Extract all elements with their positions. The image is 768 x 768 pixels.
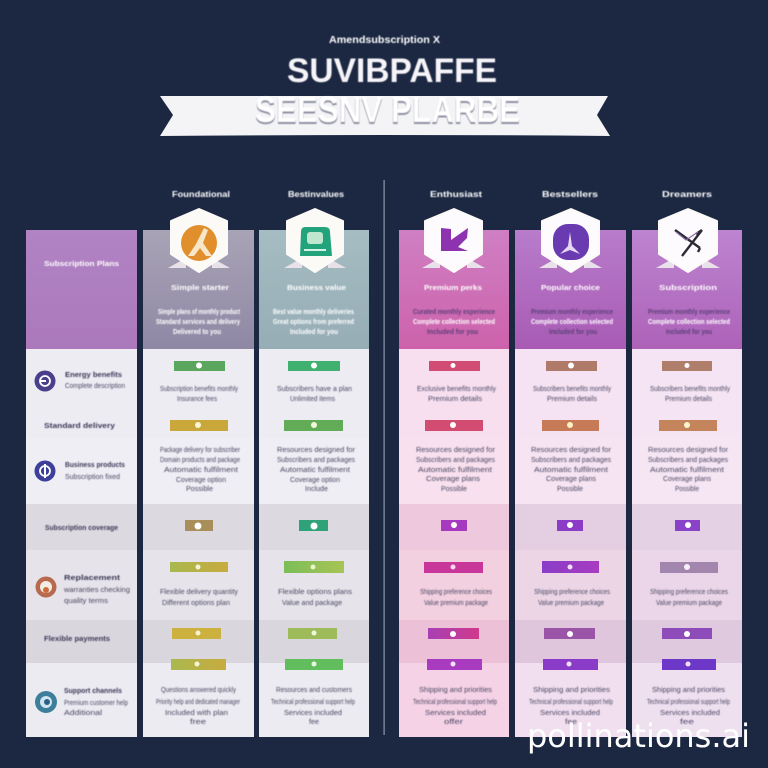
- rating bar: [660, 562, 718, 573]
- plan description: [413, 309, 495, 336]
- plan description: Included for you: [427, 329, 478, 336]
- feature text: Package delivery for subscriber: [160, 447, 241, 454]
- plan description: Great options from preferred: [273, 319, 354, 326]
- plan description: Simple plans of monthly product: [158, 309, 240, 316]
- feature text: [156, 687, 240, 726]
- row label: two: Standard delivery: [44, 423, 115, 430]
- icon: row one: [34, 370, 56, 392]
- plan subtitle: Premium perks: [424, 285, 482, 292]
- row label: four: Subscription coverage: [45, 525, 118, 532]
- feature text: Coverage plans: [546, 476, 597, 483]
- rating bar: [299, 520, 328, 531]
- panel: plan four: [515, 190, 626, 737]
- plan description: Delivered to you: [173, 329, 221, 336]
- feature text: Subscribers benefits monthly: [650, 386, 730, 393]
- feature text: offer: [444, 719, 464, 726]
- feature text: Shipping preference choices: [534, 589, 610, 596]
- feature text: Questions answered quickly: [161, 687, 236, 694]
- ribbon banner with subtitle: [160, 89, 610, 136]
- feature text: Premium details: [547, 396, 597, 403]
- plan description: Best value monthly deliveries: [273, 309, 354, 316]
- row label: one: Complete description: [65, 383, 125, 390]
- rating bar: [285, 659, 343, 670]
- feature text: Resources designed for: [531, 447, 612, 454]
- feature text: Coverage plans: [663, 476, 711, 483]
- rating bar: [662, 628, 712, 639]
- feature text: [650, 386, 730, 403]
- feature text: [277, 447, 356, 493]
- rating bar: [171, 659, 226, 670]
- plan description: Included for you: [666, 329, 712, 336]
- plan description: [648, 309, 730, 336]
- feature text: Shipping preference choices: [650, 589, 728, 596]
- rating bar: [170, 562, 228, 572]
- plan description: [531, 309, 613, 336]
- plan description: Standard services and delivery: [156, 319, 240, 326]
- feature text: Coverage option: [176, 477, 226, 484]
- plan name: Enthusiast: [430, 190, 482, 199]
- feature text: Flexible delivery quantity: [160, 589, 239, 596]
- feature text: Shipping and priorities: [652, 687, 726, 694]
- panel: row labels column: [26, 230, 137, 737]
- row label: seven: Premium customer help: [64, 700, 128, 707]
- plan description: Premium monthly experience: [531, 309, 613, 316]
- rating bar: [288, 361, 340, 371]
- plan name: Bestinvalues: [288, 190, 345, 199]
- feature text: Technical professional support help: [271, 699, 355, 706]
- feature text: Possible: [557, 486, 583, 493]
- row label: one: [65, 372, 125, 390]
- feature text: Included with plan: [165, 710, 228, 717]
- plan name: Dreamers: [662, 190, 713, 199]
- feature text: [278, 589, 353, 607]
- row label: five: warranties checking: [63, 587, 130, 594]
- rating bar: [174, 361, 225, 371]
- plan description: Complete collection selected: [648, 319, 730, 326]
- feature text: Premium details: [665, 396, 712, 403]
- feature text: Technical professional support help: [529, 699, 613, 706]
- feature text: Unlimited items: [290, 396, 335, 403]
- plan description: [156, 309, 240, 336]
- feature text: Services included: [540, 710, 600, 717]
- feature text: Value and package: [282, 600, 342, 607]
- feature text: Domain products and package: [160, 457, 240, 464]
- rating bar: [284, 561, 344, 573]
- eyebrow text: Amendsubscription X: [329, 35, 440, 46]
- rating bar: [542, 420, 599, 431]
- central divider: [384, 180, 385, 735]
- rating bar: [544, 628, 595, 639]
- plan description: Included for you: [549, 329, 597, 336]
- row label: seven: Additional: [64, 710, 103, 717]
- feature text: [417, 386, 496, 403]
- icon: crossed tools badge: [656, 209, 720, 272]
- feature text: Subscribers and packages: [277, 457, 355, 464]
- icon: row three: [34, 460, 56, 482]
- feature text: fee: [565, 719, 577, 726]
- rating bar: [675, 520, 700, 531]
- feature text: Possible: [675, 486, 699, 493]
- rating bar: [185, 520, 213, 531]
- feature text: Technical professional support help: [647, 699, 730, 706]
- plan subtitle: Popular choice: [541, 285, 600, 292]
- row label: five: Replacement: [64, 575, 121, 582]
- feature text: [416, 447, 496, 493]
- rating bar: [429, 361, 480, 371]
- feature text: Different options plan: [162, 600, 230, 607]
- feature text: Shipping and priorities: [419, 687, 493, 694]
- feature text: Subscribers and packages: [531, 457, 611, 464]
- feature text: [647, 687, 730, 726]
- feature text: Shipping preference choices: [420, 589, 492, 596]
- feature text: [413, 687, 497, 726]
- row label: five: quality terms: [64, 598, 109, 605]
- rating bar: [659, 420, 717, 431]
- rating bar: [543, 659, 598, 670]
- ribbon banner with subtitle: SEESNV PLARBE: [255, 89, 520, 130]
- feature text: fee: [309, 719, 319, 726]
- plan name: Foundational: [172, 190, 230, 199]
- feature text: Premium details: [428, 396, 483, 403]
- feature text: Subscribers and packages: [416, 457, 495, 464]
- feature text: Possible: [186, 486, 213, 493]
- feature text: [533, 386, 611, 403]
- rating bar: [172, 628, 221, 639]
- feature text: Exclusive benefits monthly: [417, 386, 496, 393]
- plan description: [273, 309, 354, 336]
- panel: plan one: [143, 190, 254, 737]
- rating bar: [662, 659, 716, 670]
- panel: plan three: [399, 190, 509, 737]
- title: SUVIBPAFFE: [287, 52, 497, 90]
- watermark: pollinations.ai: [527, 717, 750, 755]
- icon: teal badge: [284, 209, 346, 272]
- feature text: Coverage plans: [426, 476, 481, 483]
- feature text: [534, 589, 610, 607]
- feature text: Flexible options plans: [278, 589, 353, 596]
- feature text: Value premium package: [538, 600, 604, 607]
- row label: five: [63, 575, 130, 605]
- feature text: [160, 386, 238, 403]
- rating bar: [425, 420, 483, 431]
- feature text: Include: [305, 486, 328, 493]
- plan description: Complete collection selected: [531, 319, 613, 326]
- feature text: Automatic fulfilment: [280, 467, 350, 474]
- feature text: [648, 447, 729, 493]
- feature text: [529, 687, 613, 726]
- feature text: [160, 447, 241, 493]
- feature text: Services included: [660, 710, 720, 717]
- feature text: Coverage option: [290, 477, 340, 484]
- row label: six: Flexible payments: [44, 636, 110, 643]
- feature text: [531, 447, 612, 493]
- plan name: Bestsellers: [542, 190, 599, 199]
- feature text: Services included: [284, 710, 342, 717]
- feature text: Resources designed for: [648, 447, 729, 454]
- rating bar: [284, 420, 343, 431]
- feature text: fee: [680, 719, 694, 726]
- feature text: free: [190, 719, 206, 726]
- feature text: [160, 589, 239, 607]
- rating bar: [428, 628, 479, 639]
- row label: three: [65, 462, 125, 481]
- plan subtitle: Simple starter: [171, 285, 229, 292]
- feature text: Technical professional support help: [413, 699, 497, 706]
- icon: row five: [36, 576, 56, 598]
- feature text: Subscribers benefits monthly: [533, 386, 611, 393]
- feature text: [420, 589, 492, 607]
- plan subtitle: Business value: [287, 285, 346, 292]
- feature text: Value premium package: [656, 600, 722, 607]
- panel: plan two: [259, 190, 369, 737]
- icon: violet badge: [539, 209, 602, 272]
- feature text: Resources and customers: [276, 687, 352, 694]
- row label: one: Energy benefits: [65, 372, 122, 379]
- panel: plan five: [632, 190, 742, 737]
- icon: row seven: [35, 691, 57, 713]
- feature text: Resources designed for: [277, 447, 356, 454]
- rating bar: [546, 361, 597, 371]
- feature text: Priority help and dedicated manager: [156, 699, 240, 706]
- feature text: Automatic fulfilment: [650, 467, 724, 474]
- rating bar: [170, 420, 228, 431]
- rating bar: [542, 561, 599, 573]
- icon: orange badge: [168, 209, 230, 272]
- rating bar: [662, 361, 712, 371]
- icon: purple ribbon badge: [422, 209, 485, 272]
- feature text: Services included: [425, 710, 486, 717]
- plan description: Complete collection selected: [413, 319, 495, 326]
- row label: three: Business products: [65, 462, 125, 469]
- rating bar: [441, 520, 467, 531]
- feature text: Subscribers and packages: [648, 457, 728, 464]
- feature text: Automatic fulfilment: [418, 467, 492, 474]
- rating bar: [288, 628, 337, 639]
- feature text: Subscribers have a plan: [277, 386, 352, 393]
- feature text: Automatic fulfilment: [534, 467, 608, 474]
- rating bar: [424, 562, 483, 573]
- column heading: features: Subscription Plans: [44, 261, 119, 268]
- feature text: [650, 589, 728, 607]
- ribbon banner with subtitle: SEESNV PLARBE: [255, 91, 520, 132]
- rating bar: [557, 520, 583, 531]
- feature text: Subscription benefits monthly: [160, 386, 238, 393]
- feature text: Possible: [441, 486, 467, 493]
- feature text: Resources designed for: [416, 447, 496, 454]
- row label: three: Subscription fixed: [65, 474, 120, 481]
- row label: seven: [64, 688, 128, 717]
- plan subtitle: Subscription: [659, 285, 717, 292]
- rating bar: [427, 659, 482, 670]
- feature text: Value premium package: [424, 600, 488, 607]
- plan description: Curated monthly experience: [413, 309, 495, 316]
- plan description: Included for you: [290, 329, 338, 336]
- feature text: [271, 687, 355, 726]
- feature text: Insurance fees: [177, 396, 217, 403]
- feature text: Automatic fulfilment: [164, 467, 238, 474]
- feature text: Shipping and priorities: [533, 687, 611, 694]
- row label: seven: Support channels: [64, 688, 122, 695]
- feature text: [277, 386, 352, 403]
- plan description: Premium monthly experience: [648, 309, 730, 316]
